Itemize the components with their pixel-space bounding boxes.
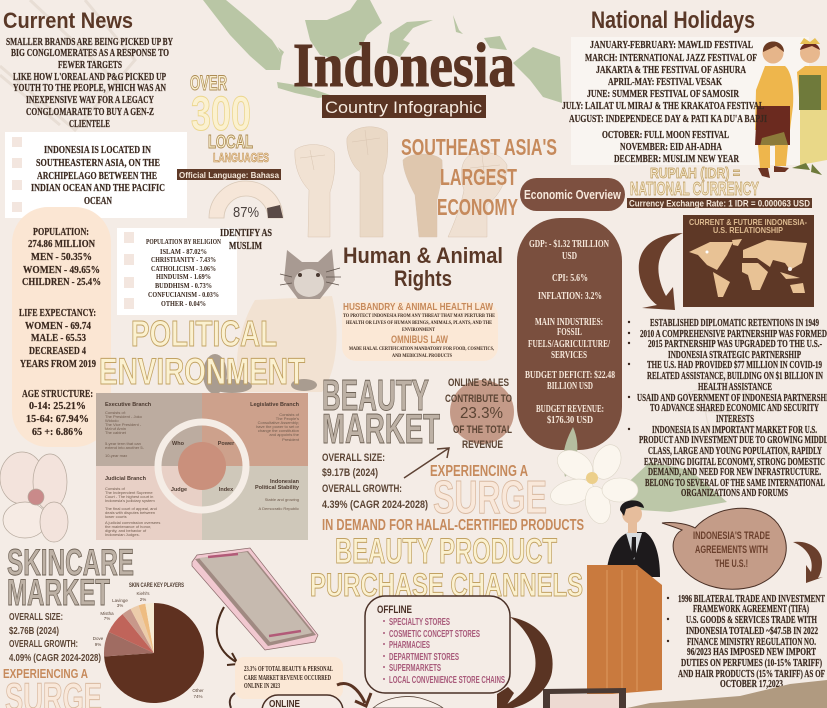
panel: political structure diagram: The final court of appeal, and	[105, 506, 157, 511]
arrow: large curved brown	[500, 617, 553, 708]
arrow: to relationship list	[639, 233, 683, 310]
panel: population by religion: OTHER - 0.04%	[161, 300, 206, 308]
panel: offline channels	[365, 596, 510, 693]
panel: rights laws: AND MEDICINAL PRODUCTS	[392, 353, 452, 359]
panel: political structure diagram: Index	[219, 487, 234, 493]
panel: political structure diagram: Stable and growing	[265, 497, 299, 502]
panel: rights laws: OMNIBUS LAW	[391, 334, 448, 346]
panel: location note: ARCHIPELAGO BETWEEN THE	[37, 171, 157, 182]
pie chart: skin care key players: 7%	[104, 616, 110, 621]
panel: political structure diagram: lower courts	[105, 514, 127, 519]
panel: rights laws: HUSBANDRY & ANIMAL HEALTH LAW	[343, 301, 493, 313]
panel: population by religion: CONFUCIANISM - 0.03%	[148, 291, 219, 299]
heading: human and animal rights	[343, 243, 503, 291]
panel: political structure diagram: The Independent Supreme	[105, 490, 153, 495]
illustration: couple in traditional dress	[755, 38, 827, 178]
text: holiday list: OCTOBER: FULL MOON FESTIVAL	[602, 130, 729, 141]
panel: population by religion: BUDDHISM - 0.73%	[155, 282, 212, 290]
pie chart: skin care key players: 9%	[95, 642, 101, 647]
languages callout	[190, 72, 269, 165]
text: relationship bullet list	[628, 318, 827, 499]
arrow: phone to online share	[217, 607, 238, 665]
text: holiday list: JUNE: SUMMER FESTIVAL OF SAMOSIR	[587, 89, 739, 100]
heading: southeast asia's largest economy	[401, 134, 557, 220]
panel: political structure diagram: Widodo	[105, 418, 119, 423]
heading: southeast asia's largest economy: LARGEST	[440, 164, 517, 190]
text: identify as muslim	[220, 228, 272, 252]
heading: human and animal rights: Rights	[394, 266, 452, 291]
heading: beauty market	[322, 371, 440, 452]
panel: offline channels: SUPERMARKETS	[389, 663, 441, 674]
text: experiencing a surge in halal demand: EXPERIENCING A	[430, 463, 528, 480]
currency callout: RUPIAH (IDR) =	[650, 165, 740, 182]
text: holiday list: APRIL-MAY: FESTIVAL VESAK	[608, 77, 723, 88]
panel: offline channels: DEPARTMENT STORES	[389, 652, 459, 663]
panel: political structure diagram: Indonesian	[270, 479, 300, 485]
panel: political structure diagram: Power	[218, 441, 235, 447]
text: holiday list	[562, 40, 767, 165]
icon: orchid flower	[0, 452, 68, 542]
panel: population by religion	[117, 228, 237, 315]
text: beauty stats	[322, 452, 428, 511]
panel: rights laws: ENVIRONMENT	[402, 327, 435, 333]
panel: demographics: 65 +: 6.86%	[32, 427, 83, 438]
panel: economic overview: FOSSIL	[557, 327, 582, 338]
arrow: to trade list	[793, 542, 823, 583]
panel: political structure diagram: the maintenance of honor,	[105, 524, 151, 529]
panel: economic overview: $176.30 USD	[547, 415, 593, 426]
panel: political structure diagram: A Democratic Republic	[259, 506, 299, 511]
icon: green leaf	[620, 462, 727, 512]
text: news body: SMALLER BRANDS ARE BEING PICKED UP BY	[6, 37, 173, 48]
heading: current news: Current News	[3, 8, 133, 33]
panel: political structure diagram: Executive Branch	[105, 402, 152, 408]
panel: political structure diagram: change the constitution	[258, 428, 299, 433]
panel: location note: INDONESIA IS LOCATED IN	[44, 145, 151, 156]
text: beauty stats: OVERALL SIZE:	[322, 452, 385, 464]
callout: online revenue share	[235, 657, 343, 699]
text: holiday list: NOVEMBER: EID AH-ADHA	[620, 142, 722, 153]
languages callout: OVER	[190, 72, 227, 95]
panel: political structure diagram: Court - The highest court in	[105, 494, 153, 499]
panel: political structure diagram: A judicial commission oversees	[105, 520, 160, 525]
pie chart: skin care key players: 3%	[117, 603, 123, 608]
panel: economic overview: CPI: 5.6%	[552, 273, 588, 284]
panel: location note: INDIAN OCEAN AND THE PACIFIC	[31, 183, 165, 194]
text: beauty stats: $9.17B (2024)	[322, 467, 378, 479]
text: relationship bullet list: INTERESTS	[716, 414, 754, 425]
illustration: man at podium	[543, 500, 662, 708]
panel: demographics: POPULATION:	[33, 227, 89, 238]
pie chart: skin care key players: Kiehl's	[136, 591, 150, 596]
panel: political structure diagram: Who	[172, 441, 185, 447]
text: skincare stats: OVERALL SIZE:	[9, 611, 63, 623]
speech bubble: trade agreements: THE U.S.!	[715, 558, 748, 570]
text: identify as muslim: MUSLIM	[229, 241, 262, 252]
heading: political environment	[99, 313, 305, 392]
arrow head: large curved brown	[497, 687, 514, 708]
panel: economic overview: MAIN INDUSTRIES:	[535, 317, 603, 328]
text: news body: INEXPENSIVE WAY FOR A LEGACY	[26, 95, 154, 106]
text: news body: FEWER TARGETS	[58, 60, 122, 71]
panel: political structure diagram: deals with disputes between	[105, 510, 155, 515]
heading: beauty market: MARKET	[322, 405, 440, 452]
cat illustration	[203, 249, 341, 394]
text: experiencing a surge: EXPERIENCING A	[3, 666, 88, 681]
panel: rights laws: MADE HALAL CERTIFICATION MANDATORY FOR FOOD, COSMETICS,	[349, 346, 494, 352]
panel: current news	[3, 8, 173, 130]
panel: demographics: WOMEN - 69.74	[25, 321, 92, 332]
panel: economic overview: INFLATION: 3.2%	[538, 291, 602, 302]
panel: political structure diagram	[96, 393, 308, 540]
text: beauty stats: 4.39% (CAGR 2024-2028)	[322, 499, 428, 511]
panel: offline channels: PHARMACIES	[389, 640, 430, 651]
arrow: offline to online	[337, 684, 371, 706]
panel: offline channels: OFFLINE	[377, 604, 412, 616]
panel: political structure diagram: Consists of	[279, 412, 300, 417]
heading: beauty product purchase channels: BEAUTY PRODUCT	[335, 532, 557, 571]
panel: demographics: CHILDREN - 25.4%	[22, 277, 101, 288]
panel: location note	[5, 132, 187, 218]
panel: demographics: DECREASED 4	[29, 346, 87, 357]
text: experiencing a surge in halal demand	[322, 463, 584, 534]
panel: demographics: AGE STRUCTURE:	[22, 389, 93, 400]
official language banner: Official Language: Bahasa	[179, 170, 279, 180]
panel: political structure diagram: Consultative Assembly;	[258, 420, 299, 425]
panel: population by religion: CATHOLICISM - 3.06%	[151, 265, 216, 273]
languages callout: 300	[191, 88, 251, 141]
panel: political structure diagram: dignity, and behavior of	[105, 528, 147, 533]
icon: frangipani flower	[548, 427, 638, 526]
heading: southeast asia's largest economy: ECONOMY	[437, 194, 518, 220]
title: Indonesia	[293, 32, 515, 100]
panel: economic overview: SERVICES	[551, 350, 587, 361]
gauge: 87 percent muslim: 87%	[233, 204, 259, 221]
languages callout: LANGUAGES	[213, 151, 269, 165]
callout: online revenue share: CARE MARKET REVENUE OCCURRED	[244, 674, 331, 682]
panel: demographics	[12, 207, 111, 447]
heading: national holidays: National Holidays	[591, 7, 755, 34]
text: experiencing a surge in halal demand: SURGE	[433, 471, 547, 523]
heading: skincare market: MARKET	[7, 572, 110, 613]
text: news body: YOUTH TO THE PEOPLE, WHICH WAS AN	[13, 83, 166, 94]
pie chart: skin care key players: Lavinge	[112, 598, 128, 603]
languages callout: LOCAL	[208, 132, 253, 152]
panel: political structure diagram: 10-year max	[105, 453, 127, 458]
panel: offline channels: SPECIALTY STORES	[389, 617, 450, 628]
panel: political structure diagram: and appoints the	[269, 432, 300, 437]
text: news body: CLIENTELE	[69, 119, 110, 130]
economic overview label	[520, 178, 625, 211]
pie chart: skin care key players: SKIN CARE KEY PLAYERS	[129, 582, 184, 589]
illustration: smartphone	[192, 548, 318, 650]
economic overview label: Economic Overview	[524, 187, 622, 202]
panel: skincare market	[3, 542, 134, 708]
text: news body: CONGLOMARATE TO BUY A GEN-Z	[26, 107, 154, 118]
panel: political structure diagram: The Vice President -	[105, 422, 142, 427]
panel: rights laws: TO PROTECT INDONESIA FROM ANY THREAT THAT MAY PERTURB THE	[343, 313, 495, 319]
panel: economic overview: BUDGET DEFICIT: $22.48	[525, 370, 615, 381]
panel: economic overview: USD	[562, 251, 577, 262]
panel: location note: SOUTHEASTERN ASIA, ON THE	[36, 158, 160, 169]
callout: online revenue share: 23.3% OF TOTAL BEAUTY & PERSONAL	[244, 665, 333, 673]
callout: online sales 23.3 percent: ONLINE SALES	[448, 377, 509, 389]
subtitle banner: Country Infographic	[325, 98, 483, 117]
panel: political structure diagram: The President - Joko	[105, 414, 143, 419]
heading: political environment: ENVIRONMENT	[99, 351, 305, 392]
panel: population by religion: POPULATION BY RELIGION	[146, 238, 221, 246]
panel: demographics: MEN - 50.35%	[31, 252, 92, 263]
panel: US relationship map: CURRENT & FUTURE INDONESIA-	[689, 217, 807, 227]
text: beauty stats: OVERALL GROWTH:	[322, 483, 402, 495]
text: holiday list: JANUARY-FEBRUARY: MAWLID FESTIVAL	[590, 40, 753, 51]
heading: southeast asia's largest economy: SOUTHEAST ASIA'S	[401, 134, 557, 160]
callout: online revenue share: ONLINE IN 2023	[244, 682, 280, 690]
panel: economic overview: GDP: - $1.32 TRILLION	[529, 239, 610, 250]
gauge: 87 percent muslim	[209, 181, 283, 221]
panel: political structure diagram: Judicial Branch	[105, 476, 147, 482]
panel: US relationship map: U.S. RELATIONSHIP	[713, 225, 783, 235]
pie chart: skin care key players: 2%	[140, 597, 146, 602]
heading: skincare market: SKINCARE	[7, 542, 134, 583]
callout: online sales 23.3 percent: 23.3%	[460, 405, 503, 422]
panel: political structure diagram: President	[282, 437, 300, 442]
panel: rights laws	[342, 301, 498, 361]
panel: economic overview: BUDGET REVENUE:	[536, 404, 604, 415]
panel: population by religion: ISLAM - 87.02%	[160, 248, 207, 256]
callout: online sales 23.3 percent: OF THE TOTAL	[453, 424, 512, 436]
text: relationship bullet list: HEALTH ASSISTANCE	[698, 382, 772, 393]
callout: online sales 23.3 percent: CONTRIBUTE TO	[445, 393, 512, 405]
heading: beauty product purchase channels: PURCHASE CHANNELS	[310, 567, 583, 603]
panel: location note: OCEAN	[84, 196, 112, 207]
pie chart: skin care key players	[93, 582, 204, 703]
panel: beauty market	[322, 371, 440, 511]
text: holiday list: DECEMBER: MUSLIM NEW YEAR	[614, 154, 739, 165]
text: holiday list: AUGUST: INDEPENDECE DAY & PATI KA DU'A BAPJI	[569, 114, 767, 125]
currency callout	[630, 165, 759, 199]
text: identify as muslim: IDENTIFY AS	[220, 228, 272, 239]
panel: demographics: LIFE EXPECTANCY:	[19, 308, 96, 319]
panel: political structure diagram: The People's	[276, 416, 299, 421]
heading: human and animal rights: Human & Animal	[343, 243, 503, 268]
panel: political structure diagram: Political Stability	[255, 485, 300, 491]
panel: offline channels: LOCAL CONVENIENCE STORE CHAINS	[389, 675, 505, 686]
panel: national holidays	[562, 7, 767, 165]
panel: rights laws: HEALTH OR LIVES OF HUMAN BEINGS, ANIMALS, PLANTS, AND THE	[346, 320, 492, 326]
currency callout: NATIONAL CURRENCY	[630, 179, 759, 199]
panel: economic overview: FUELS/AGRICULTURE/	[528, 339, 610, 350]
text: news body: LIKE HOW L'OREAL AND P&G PICKED UP	[13, 72, 166, 83]
arrow: stats to online sales	[404, 448, 449, 478]
heading: beauty market: BEAUTY	[322, 371, 429, 420]
panel: political structure diagram: Legislative Branch	[250, 402, 300, 408]
text: holiday list: MARCH: INTERNATIONAL JAZZ FESTIVAL OF	[585, 53, 757, 64]
text: trade bullet list: OCTOBER 17,2023	[720, 679, 783, 690]
panel: demographics: 0-14: 25.21%	[29, 401, 86, 412]
panel: political structure diagram: Consists of	[105, 486, 126, 491]
panel: demographics: 15-64: 67.94%	[26, 414, 89, 425]
text: trade bullet list	[667, 594, 825, 690]
text: holiday list: JAKARTA & THE FESTIVAL OF ASHURA	[596, 65, 746, 76]
panel: economic overview: BILLION USD	[547, 381, 593, 392]
text: news body: BIG CONGLOMERATES AS A RESPONSE TO	[11, 48, 169, 59]
speech bubble: trade agreements	[662, 508, 786, 589]
panel: US relationship map	[683, 215, 814, 307]
map of Indonesia	[203, 0, 562, 103]
pie chart: skin care key players: Other	[192, 688, 204, 693]
heading: skincare market	[7, 542, 134, 613]
panel: economic overview	[517, 218, 622, 450]
panel: political structure diagram: extend into another 5-	[105, 445, 145, 450]
panel: political structure diagram: Indonesia's judiciary system	[105, 498, 155, 503]
text: experiencing a surge in halal demand: IN DEMAND FOR HALAL-CERTIFIED PRODUCTS	[322, 517, 584, 534]
text: news body	[6, 37, 173, 130]
text: skincare stats: 4.09% (CAGR 2024-2028)	[9, 652, 101, 664]
panel: political structure diagram: Ma'ruf Amin	[105, 426, 126, 431]
text: skincare stats: $2.76B (2024)	[9, 625, 59, 637]
pie chart: skin care key players: Dove	[93, 636, 104, 641]
pie chart: skin care key players: 74%	[193, 694, 203, 699]
text: skincare stats	[9, 611, 101, 664]
text: experiencing a surge	[3, 666, 102, 708]
panel: online channel	[230, 693, 343, 708]
panel: political structure diagram: Judge	[171, 487, 187, 493]
panel: demographics: YEARS FROM 2019	[20, 359, 96, 370]
heading: political environment: POLITICAL	[131, 313, 277, 354]
panel: political structure diagram: Indonesian Judges.	[105, 532, 140, 537]
panel: population by religion: CHRISTIANITY - 7.43%	[151, 256, 216, 264]
panel: demographics: 274.86 MILLION	[28, 239, 95, 250]
panel: political structure diagram: have the power to set or	[256, 424, 300, 429]
callout: online sales 23.3 percent	[445, 377, 514, 451]
decorative torn paper strip	[627, 680, 827, 708]
outline: bottom shape	[373, 696, 443, 708]
panel: demographics: WOMEN - 49.65%	[23, 265, 100, 276]
panel: offline channels: COSMETIC CONCEPT STORES	[389, 629, 480, 640]
panel: demographics: MALE - 65.53	[31, 333, 86, 344]
panel: political structure diagram: The cabinet	[105, 430, 127, 435]
text: skincare stats: OVERALL GROWTH:	[9, 638, 78, 650]
panel: population by religion: HINDUISM - 1.69%	[156, 273, 211, 281]
speech bubble: trade agreements: INDONESIA'S TRADE	[693, 530, 770, 542]
holidays background panel	[571, 37, 809, 165]
panel: political structure diagram: 5-year term that can	[105, 441, 141, 446]
pie chart: skin care key players: Mistha	[100, 611, 114, 616]
callout: online sales 23.3 percent: REVENUE	[462, 439, 503, 451]
heading: beauty product purchase channels	[310, 532, 583, 603]
panel: political structure diagram: Consists of:	[105, 410, 126, 415]
fists illustration	[295, 127, 507, 237]
speech bubble: trade agreements: AGREEMENTS WITH	[695, 544, 768, 556]
